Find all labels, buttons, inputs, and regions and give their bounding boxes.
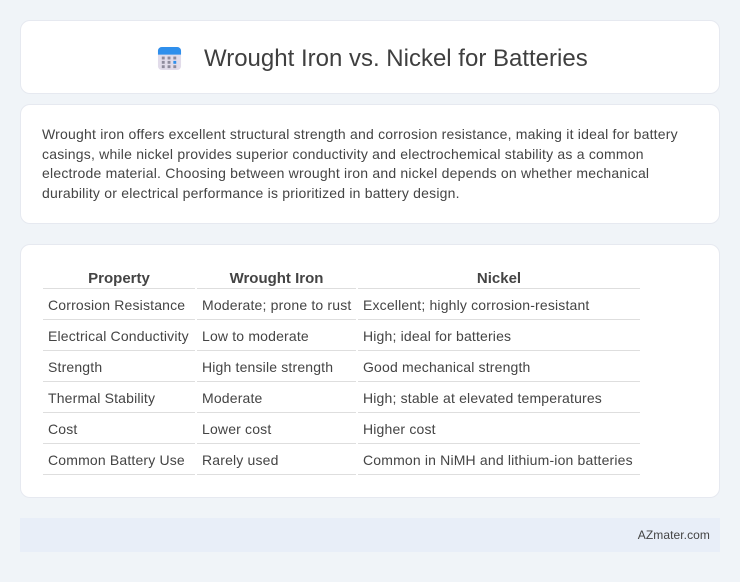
row: thermal stability: Thermal Stability (48, 390, 155, 406)
row: strength: Strength (48, 359, 102, 375)
table header: Nickel (477, 270, 521, 287)
row: strength: High tensile strength (202, 359, 333, 375)
row: strength (48, 359, 531, 375)
row: electrical conductivity (48, 328, 511, 344)
row: cost: Lower cost (202, 421, 271, 437)
row: electrical conductivity: Low to moderate (202, 328, 309, 344)
footer source text: AZmater.com (638, 528, 710, 542)
row: thermal stability (48, 390, 602, 406)
intro text (42, 126, 678, 201)
row: corrosion resistance: Corrosion Resistance (48, 297, 185, 313)
table header: Property (88, 270, 150, 287)
icon: calendar (158, 47, 182, 70)
row: thermal stability: Moderate (202, 390, 263, 406)
row: cost (48, 421, 436, 437)
title: Wrought Iron vs. Nickel for Batteries (204, 45, 588, 72)
row: common battery use: Rarely used (202, 452, 279, 468)
row: strength: Good mechanical strength (363, 359, 531, 375)
row: common battery use: Common in NiMH and lithium-ion batteries (363, 452, 633, 468)
intro text: Wrought iron offers excellent structural strength and corrosion resistance, making it ideal for battery (42, 126, 678, 142)
row: electrical conductivity: High; ideal for batteries (363, 328, 511, 344)
table header: Wrought Iron (230, 270, 323, 287)
intro text: electrode material. Choosing between wrought iron and nickel depends on whether mechanical (42, 165, 649, 181)
panel: comparison table (20, 244, 720, 498)
panel: introduction (20, 104, 720, 224)
intro text: casings, while nickel provides superior conductivity and electrochemical stability as a common (42, 146, 644, 162)
row: common battery use: Common Battery Use (48, 452, 185, 468)
row: thermal stability: High; stable at elevated temperatures (363, 390, 602, 406)
row: corrosion resistance: Excellent; highly corrosion-resistant (363, 297, 590, 313)
row: corrosion resistance: Moderate; prone to rust (202, 297, 351, 313)
row: common battery use (48, 452, 633, 468)
footer bar (20, 518, 720, 552)
row: cost: Cost (48, 421, 77, 437)
intro text: durability or electrical performance is prioritized in battery design. (42, 185, 460, 201)
table header (88, 270, 521, 287)
row: electrical conductivity: Electrical Conductivity (48, 328, 189, 344)
row: cost: Higher cost (363, 421, 436, 437)
row: corrosion resistance (48, 297, 590, 313)
panel: title card (20, 20, 720, 94)
